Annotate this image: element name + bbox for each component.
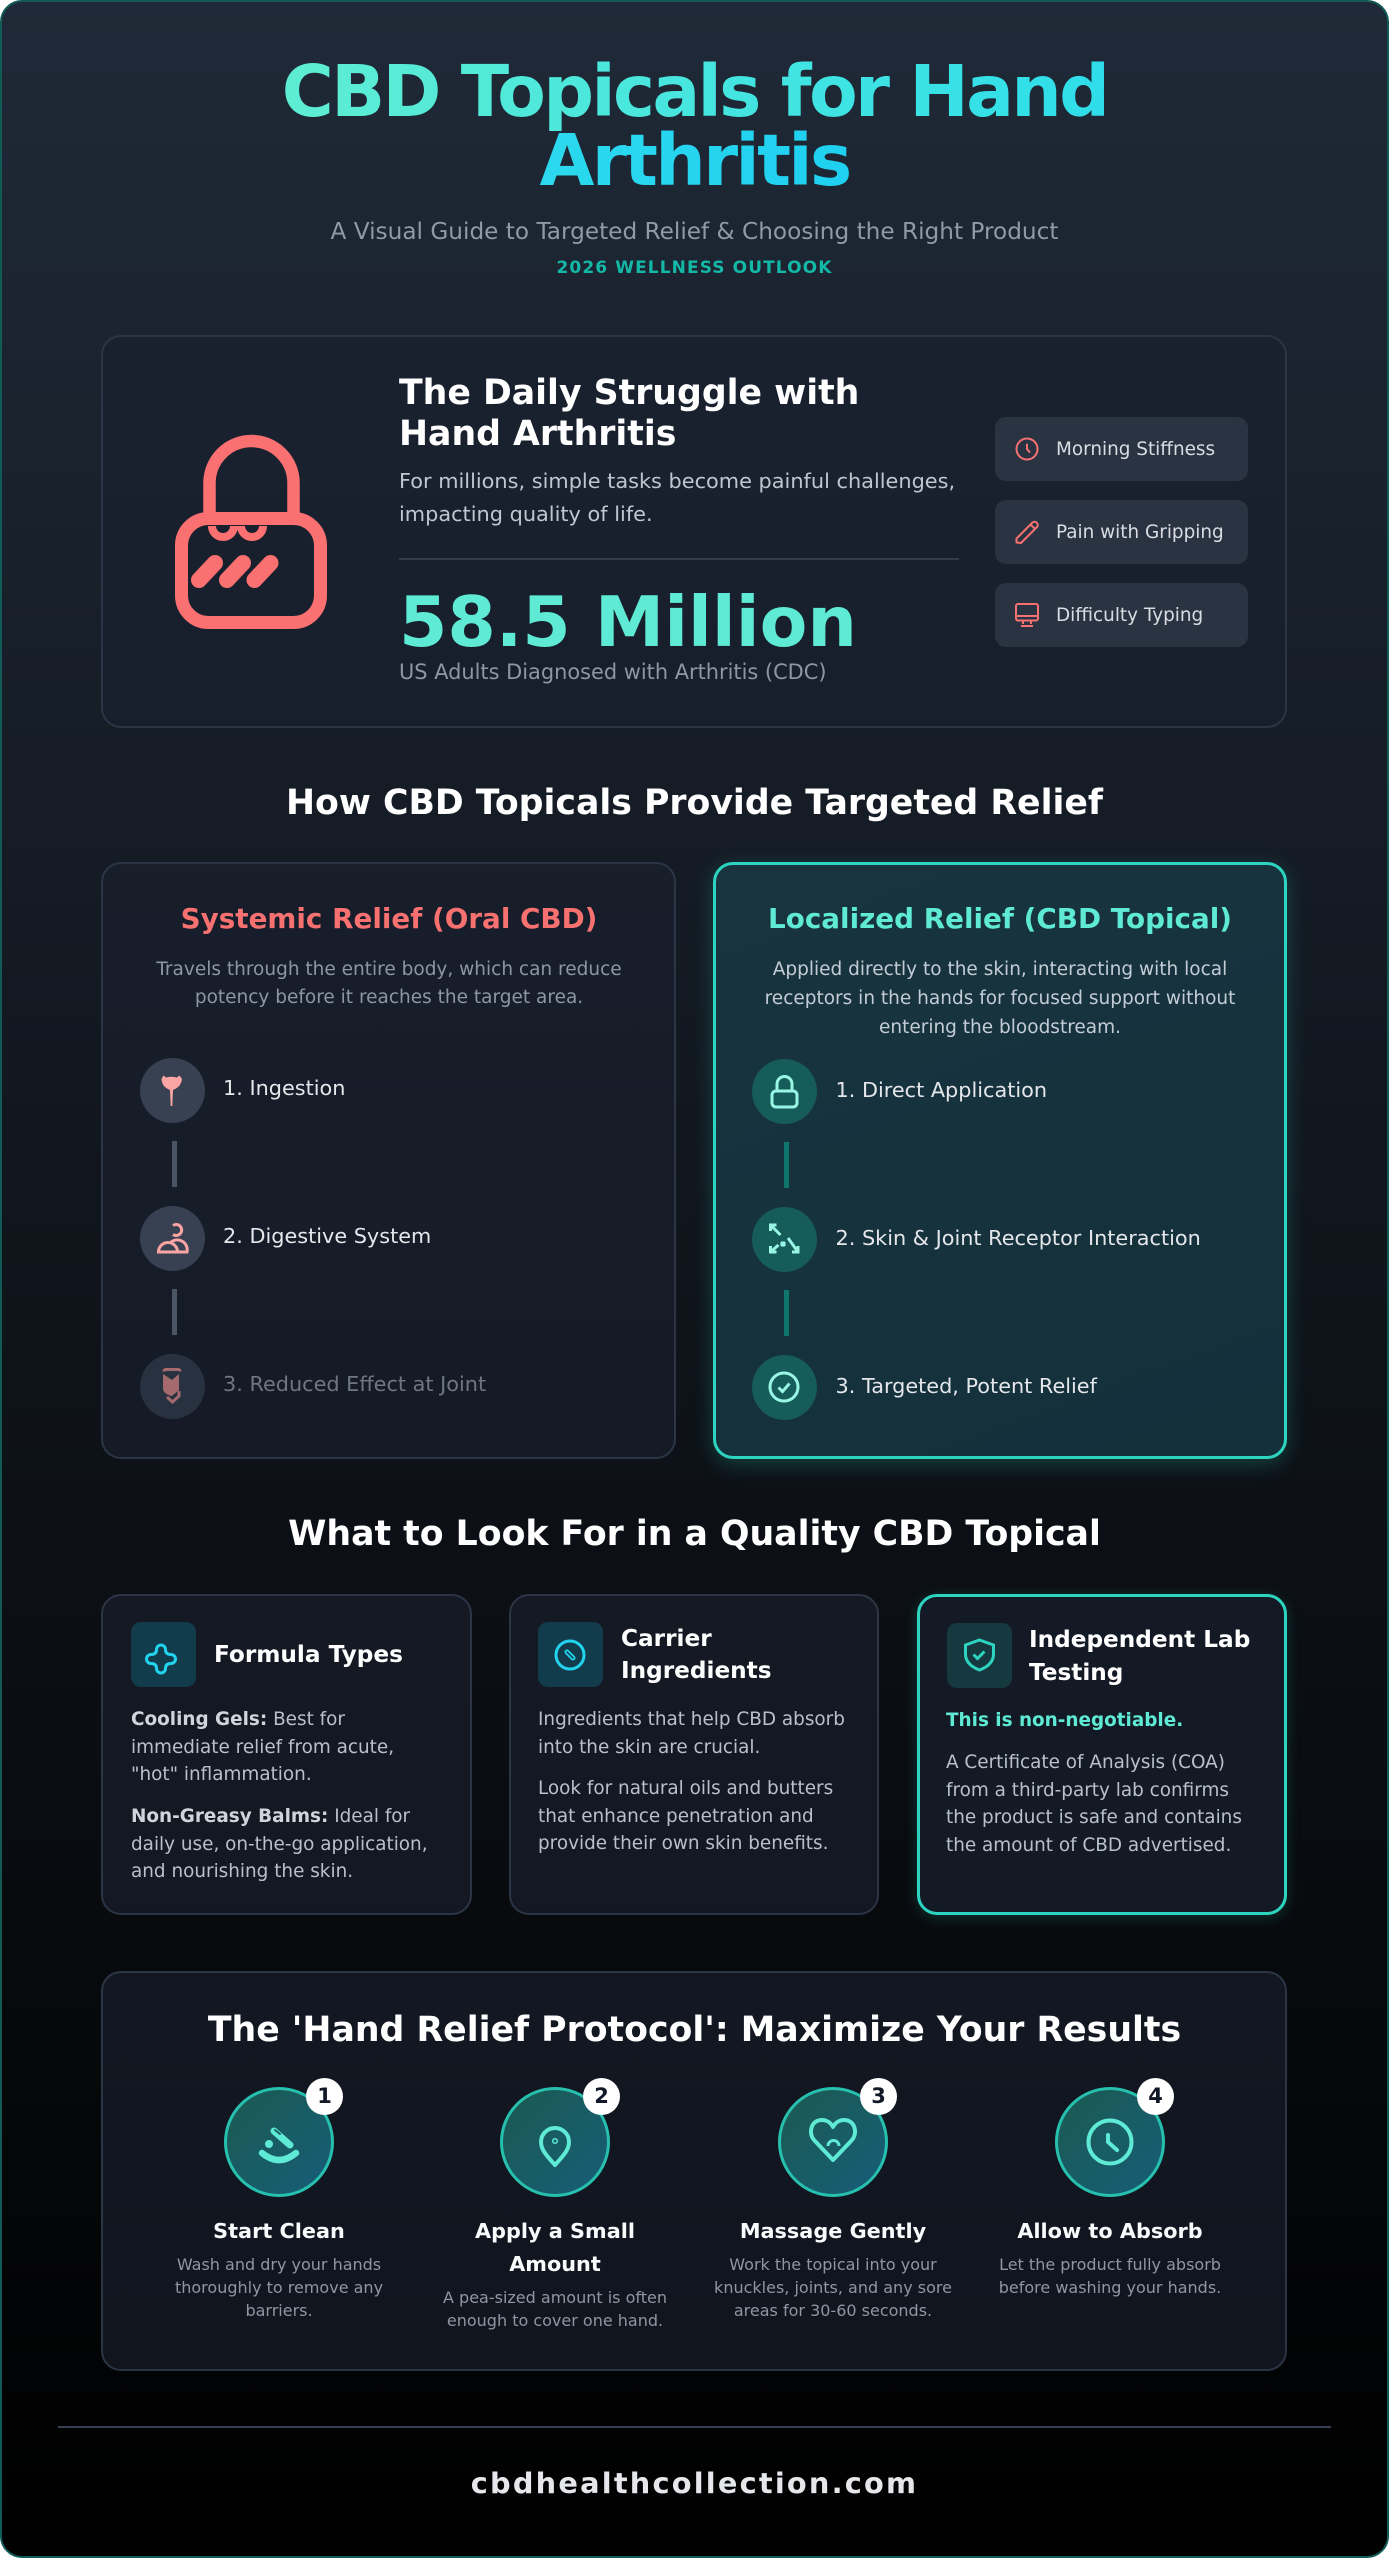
badge: 2 xyxy=(583,2078,620,2115)
pill: difficulty typing xyxy=(995,583,1248,647)
connector xyxy=(172,1289,177,1335)
heading: lab testing: Independent Lab xyxy=(1029,1626,1250,1653)
step text: apply: enough to cover one hand. xyxy=(447,2311,663,2330)
step title: apply: Amount xyxy=(509,2252,601,2276)
text: lab testing: the product is safe and contains xyxy=(946,1807,1242,1828)
text: balms: daily use, on-the-go application, xyxy=(131,1834,428,1855)
stat: 58.5 million: 58.5 Million xyxy=(399,582,857,662)
step text: absorb xyxy=(999,2255,1221,2297)
title: Arthritis xyxy=(539,119,850,202)
text: balms: Non-Greasy Balms: Ideal for xyxy=(131,1806,410,1827)
label: direct application: 1. Direct Application xyxy=(836,1078,1047,1102)
footer url: cbdhealthcollection.com xyxy=(471,2466,918,2500)
label: targeted relief: 3. Targeted, Potent Relief xyxy=(836,1374,1097,1398)
heading: daily struggle: The Daily Struggle with xyxy=(399,373,859,413)
card: lab testing xyxy=(917,1594,1287,1915)
label: ingestion: 1. Ingestion xyxy=(223,1076,345,1100)
text: carrier intro: Ingredients that help CBD absorb xyxy=(538,1709,845,1730)
heading: carrier ingredients: Ingredients xyxy=(621,1657,772,1684)
step: direct application xyxy=(752,1059,817,1124)
step text: apply: A pea-sized amount is often xyxy=(443,2288,667,2307)
label: reduced effect: 3. Reduced Effect at Joint xyxy=(223,1372,486,1396)
text: carrier detail xyxy=(538,1778,833,1854)
badge: 4 xyxy=(1137,2078,1174,2115)
connector xyxy=(172,1141,177,1187)
text: daily struggle description xyxy=(399,468,955,526)
panel: systemic relief xyxy=(101,862,676,1459)
text: carrier intro xyxy=(538,1709,845,1758)
text: formula types xyxy=(131,1709,394,1785)
pill: morning stiffness xyxy=(995,417,1248,481)
step text: absorb: before washing your hands. xyxy=(999,2278,1221,2297)
text: balms: and nourishing the skin. xyxy=(131,1861,353,1882)
label: receptor interaction: 2. Skin & Joint Receptor Interaction xyxy=(836,1226,1201,1250)
step: ingestion xyxy=(140,1058,205,1123)
heading: daily struggle xyxy=(399,373,859,454)
badge: 1 xyxy=(306,2078,343,2115)
step title: apply xyxy=(475,2218,635,2276)
heading: formula types: Formula Types xyxy=(214,1641,403,1668)
text: lab testing xyxy=(946,1752,1242,1856)
text: carrier detail: Look for natural oils and butters xyxy=(538,1778,833,1799)
step text: massage: knuckles, joints, and any sore xyxy=(714,2278,952,2297)
text: carrier detail: provide their own skin benefits. xyxy=(538,1833,828,1854)
text: carrier detail: that enhance penetration and xyxy=(538,1806,814,1827)
icon: shield check xyxy=(947,1623,1012,1688)
heading: lab testing xyxy=(1029,1626,1250,1686)
pill: difficulty typing: Difficulty Typing xyxy=(1056,605,1203,626)
step text: start clean: Wash and dry your hands xyxy=(177,2255,381,2274)
text: carrier intro: into the skin are crucial. xyxy=(538,1737,760,1758)
subtitle: A Visual Guide to Targeted Relief & Choosing the Right Product xyxy=(331,218,1058,245)
step: digestive system xyxy=(140,1206,205,1271)
text: systemic description xyxy=(156,959,622,1008)
text: daily struggle description: For millions, simple tasks become painful challenges, xyxy=(399,468,955,492)
text: lab testing: A Certificate of Analysis (COA) xyxy=(946,1752,1225,1773)
panel: the daily struggle xyxy=(101,335,1287,728)
step text: massage: Work the topical into your xyxy=(729,2255,937,2274)
step title: absorb: Allow to Absorb xyxy=(1017,2218,1203,2242)
title: CBD Topicals for Hand xyxy=(282,50,1107,133)
heading: carrier ingredients: Carrier xyxy=(621,1624,712,1652)
heading: lab testing: Testing xyxy=(1029,1659,1123,1686)
step: receptor interaction xyxy=(752,1207,817,1272)
heading: localized relief: Localized Relief (CBD Topical) xyxy=(768,902,1232,934)
badge: 1: 1 xyxy=(317,2084,332,2108)
label: digestive system: 2. Digestive System xyxy=(223,1224,431,1248)
card: formula types xyxy=(101,1594,472,1915)
text: localized description: receptors in the hands for focused support without xyxy=(765,988,1235,1009)
icon: step 3 massage xyxy=(778,2087,888,2197)
text: formula types: immediate relief from acute, xyxy=(131,1737,394,1758)
icon: step 4 clock xyxy=(1055,2087,1165,2197)
pill: pain with gripping: Pain with Gripping xyxy=(1056,522,1224,543)
step text: massage xyxy=(714,2255,952,2320)
tagline: 2026 WELLNESS OUTLOOK xyxy=(556,258,832,278)
heading: what to look for: What to Look For in a Quality CBD Topical xyxy=(288,1514,1101,1554)
step title: apply: Apply a Small xyxy=(475,2218,635,2242)
text: systemic description: Travels through the entire body, which can reduce xyxy=(156,959,622,980)
icon: step 1 start clean xyxy=(224,2087,334,2197)
text: lab testing: the amount of CBD advertised. xyxy=(946,1835,1231,1856)
icon: plus xyxy=(131,1622,196,1687)
step title: massage: Massage Gently xyxy=(740,2218,926,2242)
heading: carrier ingredients xyxy=(621,1624,772,1684)
heading: systemic relief: Systemic Relief (Oral CBD) xyxy=(181,902,597,934)
step title: start clean: Start Clean xyxy=(213,2218,345,2242)
step text: massage: areas for 30-60 seconds. xyxy=(734,2301,932,2320)
pill: morning stiffness: Morning Stiffness xyxy=(1056,439,1215,460)
step text: start clean xyxy=(175,2255,383,2320)
step text: absorb: Let the product fully absorb xyxy=(999,2255,1221,2274)
footer divider xyxy=(58,2426,1331,2428)
heading: protocol: The 'Hand Relief Protocol': Maximize Your Results xyxy=(208,2010,1181,2050)
text: daily struggle description: impacting quality of life. xyxy=(399,502,653,526)
card: carrier ingredients xyxy=(509,1594,879,1915)
step: reduced effect xyxy=(140,1354,205,1419)
heading: how CBD topicals work: How CBD Topicals Provide Targeted Relief xyxy=(286,783,1103,823)
text: formula types: Cooling Gels: Best for xyxy=(131,1709,345,1730)
panel: hand relief protocol xyxy=(101,1971,1287,2371)
text: localized description: Applied directly to the skin, interacting with local xyxy=(773,959,1227,980)
badge: 3: 3 xyxy=(871,2084,886,2108)
text: localized description xyxy=(765,959,1235,1038)
title xyxy=(282,50,1107,202)
heading: daily struggle: Hand Arthritis xyxy=(399,414,676,454)
step text: apply xyxy=(443,2288,667,2330)
callout: non-negotiable: This is non-negotiable. xyxy=(946,1710,1183,1731)
pill: pain with gripping xyxy=(995,500,1248,564)
badge: 3 xyxy=(860,2078,897,2115)
text: formula types: "hot" inflammation. xyxy=(131,1764,312,1785)
text: systemic description: potency before it reaches the target area. xyxy=(195,987,583,1008)
connector xyxy=(784,1290,789,1336)
step: targeted relief xyxy=(752,1355,817,1420)
step text: start clean: thoroughly to remove any xyxy=(175,2278,383,2297)
text: lab testing: from a third-party lab confirms xyxy=(946,1780,1229,1801)
panel: localized relief xyxy=(713,862,1287,1459)
stat caption: US Adults Diagnosed with Arthritis (CDC) xyxy=(399,660,826,684)
text: localized description: entering the bloodstream. xyxy=(879,1017,1121,1038)
step text: start clean: barriers. xyxy=(245,2301,313,2320)
text: balms xyxy=(131,1806,428,1882)
badge: 2: 2 xyxy=(594,2084,609,2108)
icon: step 2 apply xyxy=(500,2087,610,2197)
icon: circle pill xyxy=(538,1622,603,1687)
badge: 4: 4 xyxy=(1148,2084,1163,2108)
connector xyxy=(784,1142,789,1188)
divider xyxy=(399,558,959,560)
